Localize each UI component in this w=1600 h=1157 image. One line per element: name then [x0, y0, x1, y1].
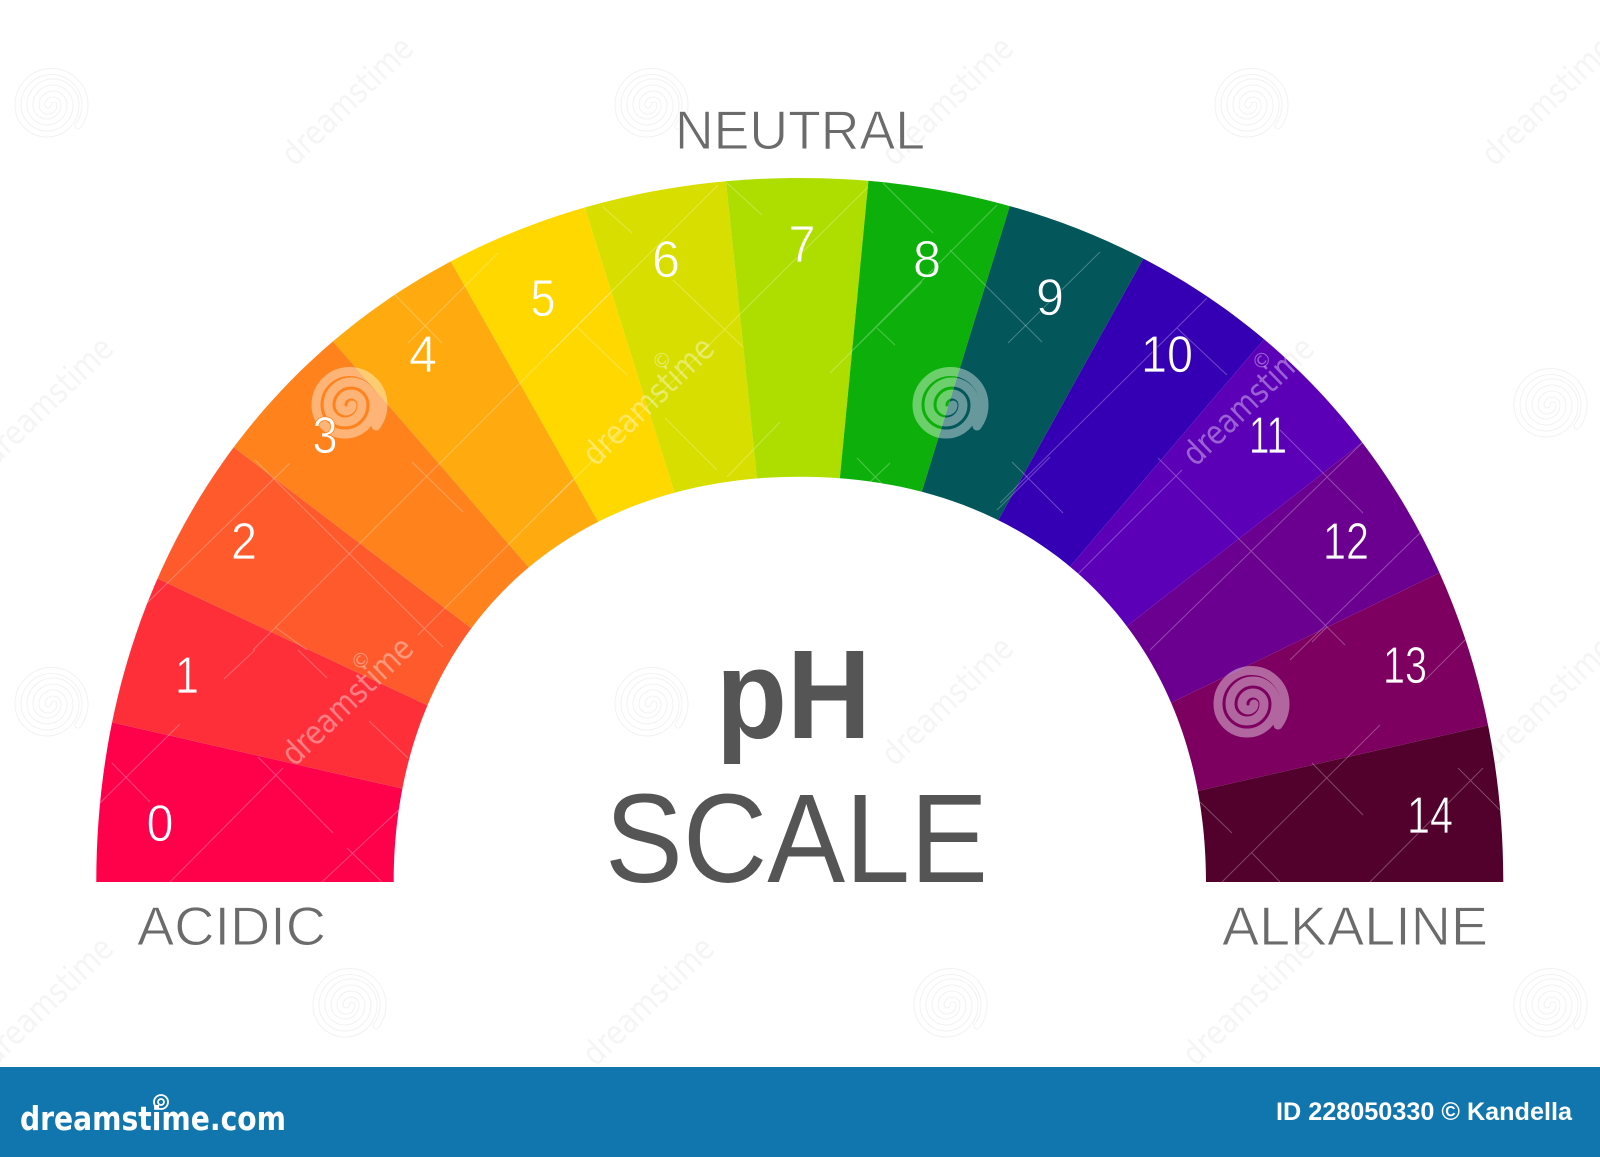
watermark: marks over colour: dreamstime [273, 628, 421, 773]
segment: pH 0 [96, 722, 402, 882]
scale numbers 0 to 14: 14 [1407, 787, 1453, 845]
chart: pH semicircle gauge [60, 147, 1540, 882]
watermark: faint marks on white: dreamstime [873, 628, 1021, 773]
segment: pH 3 [234, 341, 529, 628]
scale numbers 0 to 14: 11 [1249, 407, 1287, 465]
scale numbers 0 to 14: 8 [913, 231, 941, 289]
segment: pH 6 [584, 181, 757, 493]
watermark: faint marks on white: dreamstime [1174, 928, 1322, 1073]
segment: pH 8 [840, 180, 1010, 492]
footer bar [0, 1067, 1600, 1157]
label: ALKALINE: ALKALINE [1222, 895, 1488, 957]
scale numbers 0 to 14 [146, 216, 1453, 853]
scale numbers 0 to 14: 12 [1323, 513, 1369, 571]
scale numbers 0 to 14: 5 [530, 270, 556, 328]
scale numbers 0 to 14: 3 [312, 407, 338, 465]
footer logo text: dreamstime.com [20, 1099, 286, 1138]
watermark: faint marks on white: dreamstime [574, 928, 722, 1073]
scale numbers 0 to 14: 6 [652, 231, 680, 289]
title: pH: pH [716, 624, 871, 765]
watermark: faint marks on white: dreamstime [1174, 328, 1322, 473]
scale numbers 0 to 14: 2 [231, 513, 257, 571]
watermark: marks over colour: © [1246, 345, 1277, 376]
title: SCALE: SCALE [605, 768, 988, 909]
scale numbers 0 to 14: 13 [1383, 637, 1427, 695]
scale numbers 0 to 14: 7 [788, 216, 816, 274]
scale numbers 0 to 14: 1 [175, 647, 199, 705]
watermark: marks over colour: © [646, 345, 677, 376]
watermark: faint marks on white: dreamstime [273, 28, 421, 173]
segment: pH 10 [998, 258, 1264, 567]
segment: pH 14 [1198, 725, 1504, 882]
segment: pH 1 [112, 578, 428, 789]
segment: pH 11 [1070, 339, 1362, 626]
watermark: marks over colour [286, 341, 1296, 764]
scale numbers 0 to 14: 0 [146, 795, 174, 853]
segment: pH 2 [158, 447, 472, 706]
scale numbers 0 to 14: 4 [409, 326, 437, 384]
segment: pH 12 [1126, 442, 1440, 703]
watermark: marks over colour: dreamstime [1174, 328, 1322, 473]
segment: pH 9 [922, 206, 1144, 520]
segment: pH 5 [450, 208, 674, 522]
scale numbers 0 to 14: 9 [1036, 269, 1064, 327]
footer credit: ID 228050330 © Kandella [1276, 1098, 1573, 1126]
watermark: marks over colour: dreamstime [574, 328, 722, 473]
watermark: faint marks on white: dreamstime [873, 28, 1021, 173]
segment: pH 7 [726, 178, 868, 478]
label: NEUTRAL: NEUTRAL [675, 99, 925, 161]
icon: footer spiral [154, 1095, 168, 1109]
watermark: marks over colour: © [345, 645, 376, 676]
label: ACIDIC: ACIDIC [137, 895, 326, 957]
segment: pH 4 [333, 262, 598, 568]
segment: pH 13 [1171, 572, 1488, 791]
scale numbers 0 to 14: 10 [1141, 326, 1193, 384]
